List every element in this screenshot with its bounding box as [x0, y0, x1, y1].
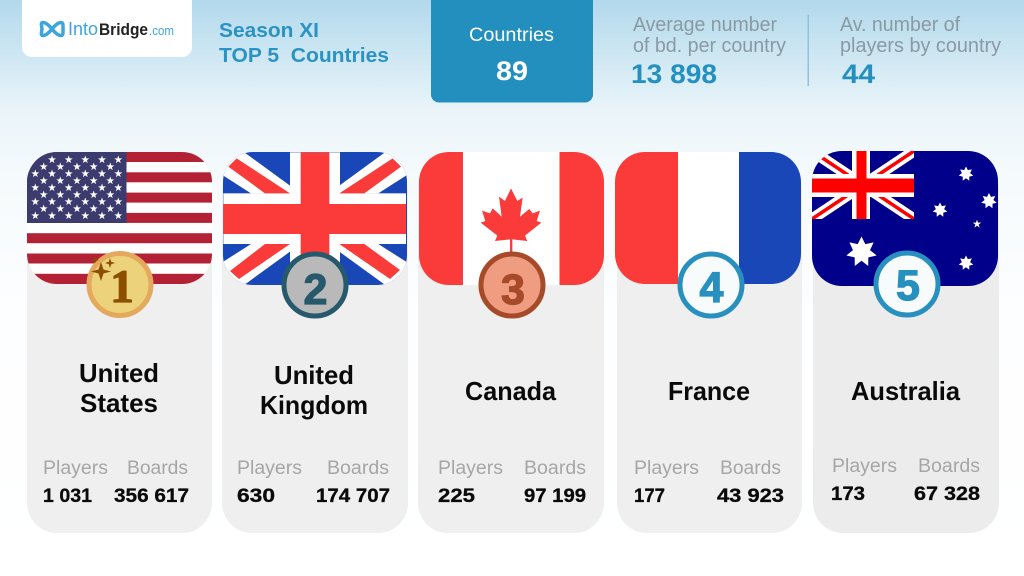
stats: Players — [237, 458, 302, 479]
stats — [634, 458, 784, 507]
stats: Boards — [918, 456, 980, 477]
flag: United Kingdom — [223, 152, 407, 285]
country name: Canada — [465, 376, 557, 406]
stats: Boards — [524, 458, 586, 479]
badge: rank 3 — [481, 254, 543, 316]
logo wordmark — [68, 19, 174, 39]
panel: United Kingdom — [222, 152, 408, 533]
icon: infinity bridge logo — [41, 22, 63, 36]
stats — [831, 456, 980, 505]
stats: Players — [43, 458, 108, 479]
stats: 177 — [634, 486, 665, 507]
flag: United States — [27, 152, 212, 285]
stats: Boards — [127, 458, 188, 479]
stats — [438, 458, 586, 507]
stat panel: countries — [431, 0, 593, 102]
badge: rank 4 — [680, 254, 742, 316]
stats: 67 328 — [914, 484, 980, 505]
logo panel — [22, 0, 192, 57]
stat: average boards per country: of bd. per country — [633, 35, 786, 57]
stats — [43, 458, 189, 507]
stat: average boards per country — [631, 14, 786, 89]
stats: Players — [832, 456, 897, 477]
title: Season XI — [219, 20, 319, 42]
panel: Canada — [418, 152, 604, 533]
stats: 43 923 — [717, 486, 784, 507]
flag: Australia — [812, 151, 998, 286]
badge: rank 2: 2 — [304, 266, 327, 314]
country name: Kingdom — [260, 390, 368, 420]
badge: rank 2 — [284, 254, 346, 316]
stat: average players by country: Av. number of — [840, 14, 960, 36]
stats: 97 199 — [524, 486, 586, 507]
stats: 173 — [831, 484, 865, 505]
stat panel: countries: Countries — [469, 25, 554, 46]
country name: Australia — [851, 376, 961, 406]
flag: France — [615, 152, 801, 284]
stats: 1 031 — [43, 486, 92, 507]
country name — [79, 358, 159, 418]
stat: average players by country: 44 — [842, 59, 875, 89]
badge: rank 3: 3 — [501, 266, 525, 314]
stats: 630 — [237, 486, 275, 507]
panel: Australia — [812, 151, 999, 533]
badge: rank 1: 1 — [110, 261, 134, 313]
badge: rank 5 — [876, 253, 938, 315]
country name: France — [668, 376, 750, 406]
title: TOP 5 Countries — [219, 45, 389, 67]
stats — [237, 458, 390, 507]
stats: 356 617 — [114, 486, 189, 507]
stats: 174 707 — [316, 486, 390, 507]
stats: Players — [634, 458, 699, 479]
panel: United States — [27, 152, 212, 533]
country name: States — [80, 388, 158, 418]
stat: average players by country — [840, 14, 1001, 89]
stats: 225 — [438, 486, 476, 507]
title — [219, 20, 389, 67]
stat: average boards per country: Average number — [633, 14, 777, 36]
country name — [260, 360, 368, 420]
stat panel: countries: 89 — [496, 56, 528, 86]
badge: rank 4: 4 — [700, 264, 724, 312]
country name: United — [79, 358, 159, 388]
stats: Boards — [720, 458, 781, 479]
flag: Canada — [419, 152, 604, 285]
stat: average boards per country: 13 898 — [631, 59, 717, 89]
stats: Players — [438, 458, 503, 479]
logo wordmark: .com — [149, 24, 174, 38]
logo wordmark: Into — [68, 19, 98, 39]
stat: average players by country: players by country — [840, 35, 1001, 57]
stats: Boards — [327, 458, 389, 479]
country name: United — [274, 360, 354, 390]
panel: France — [615, 152, 802, 533]
badge: rank 5: 5 — [896, 262, 920, 310]
badge: rank 1 — [89, 254, 151, 316]
logo wordmark: Bridge — [99, 20, 148, 39]
